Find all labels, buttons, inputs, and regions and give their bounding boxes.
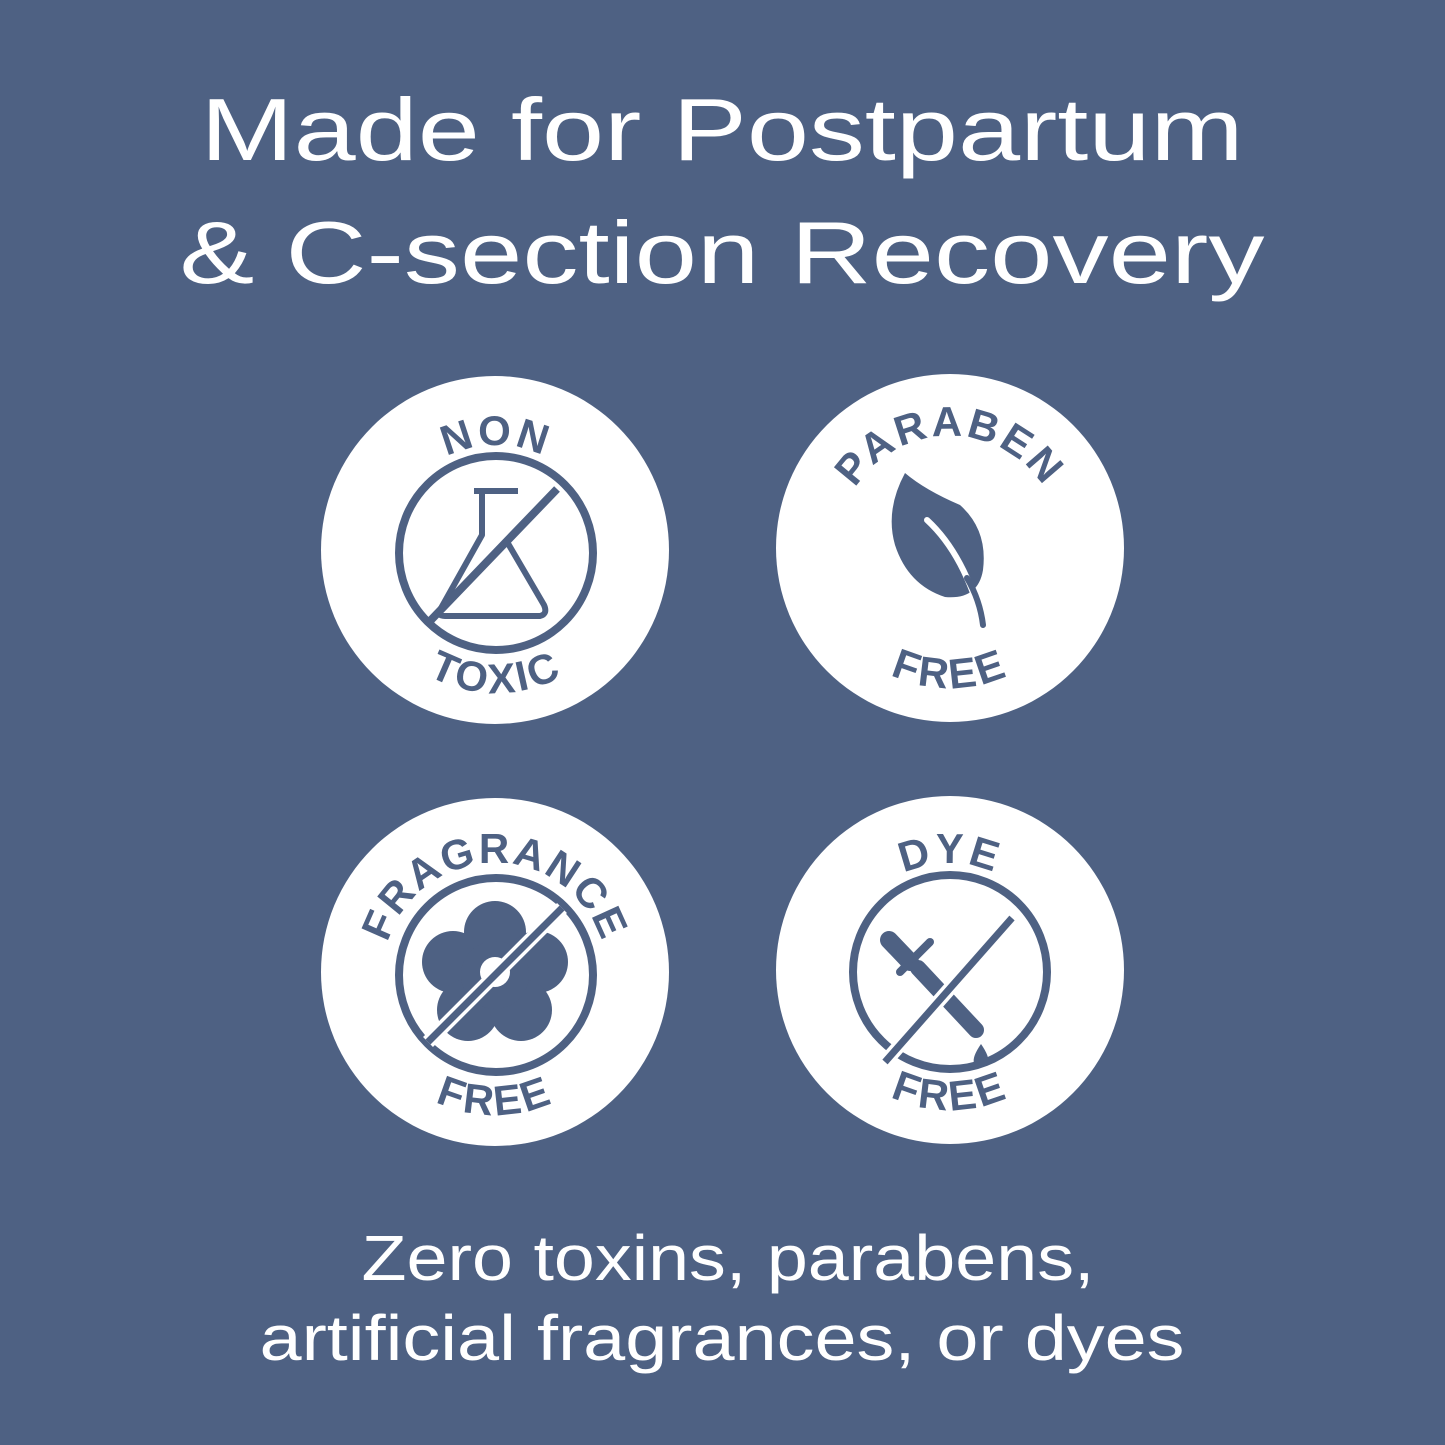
badge: dye free: FREE [892,1070,1006,1111]
icon: dropper [889,940,976,1030]
title: & C-section Recovery [180,203,1264,302]
badge: dye free: DYE [898,834,1000,872]
icon: flower [422,901,568,1041]
footer text: Zero toxins, parabens, [362,1222,1094,1294]
badge: paraben free: PARABEN [834,407,1064,486]
badge: non toxic [321,376,669,724]
badge: non toxic: NON [440,416,550,455]
footer text [260,1222,1184,1374]
badge: paraben free: FREE [892,648,1006,689]
icon: leaf [892,473,984,597]
badge: paraben free [776,374,1124,722]
title: Made for Postpartum [200,80,1244,179]
footer text: artificial fragrances, or dyes [260,1302,1184,1374]
badge: non toxic: TOXIC [436,650,558,694]
badge: fragrance free [321,798,669,1146]
title [180,80,1264,302]
badge: fragrance free: FREE [437,1076,551,1116]
badge: fragrance free: FRAGRANCE [362,834,628,940]
badge: dye free [776,796,1124,1144]
icon: flask [439,491,545,616]
